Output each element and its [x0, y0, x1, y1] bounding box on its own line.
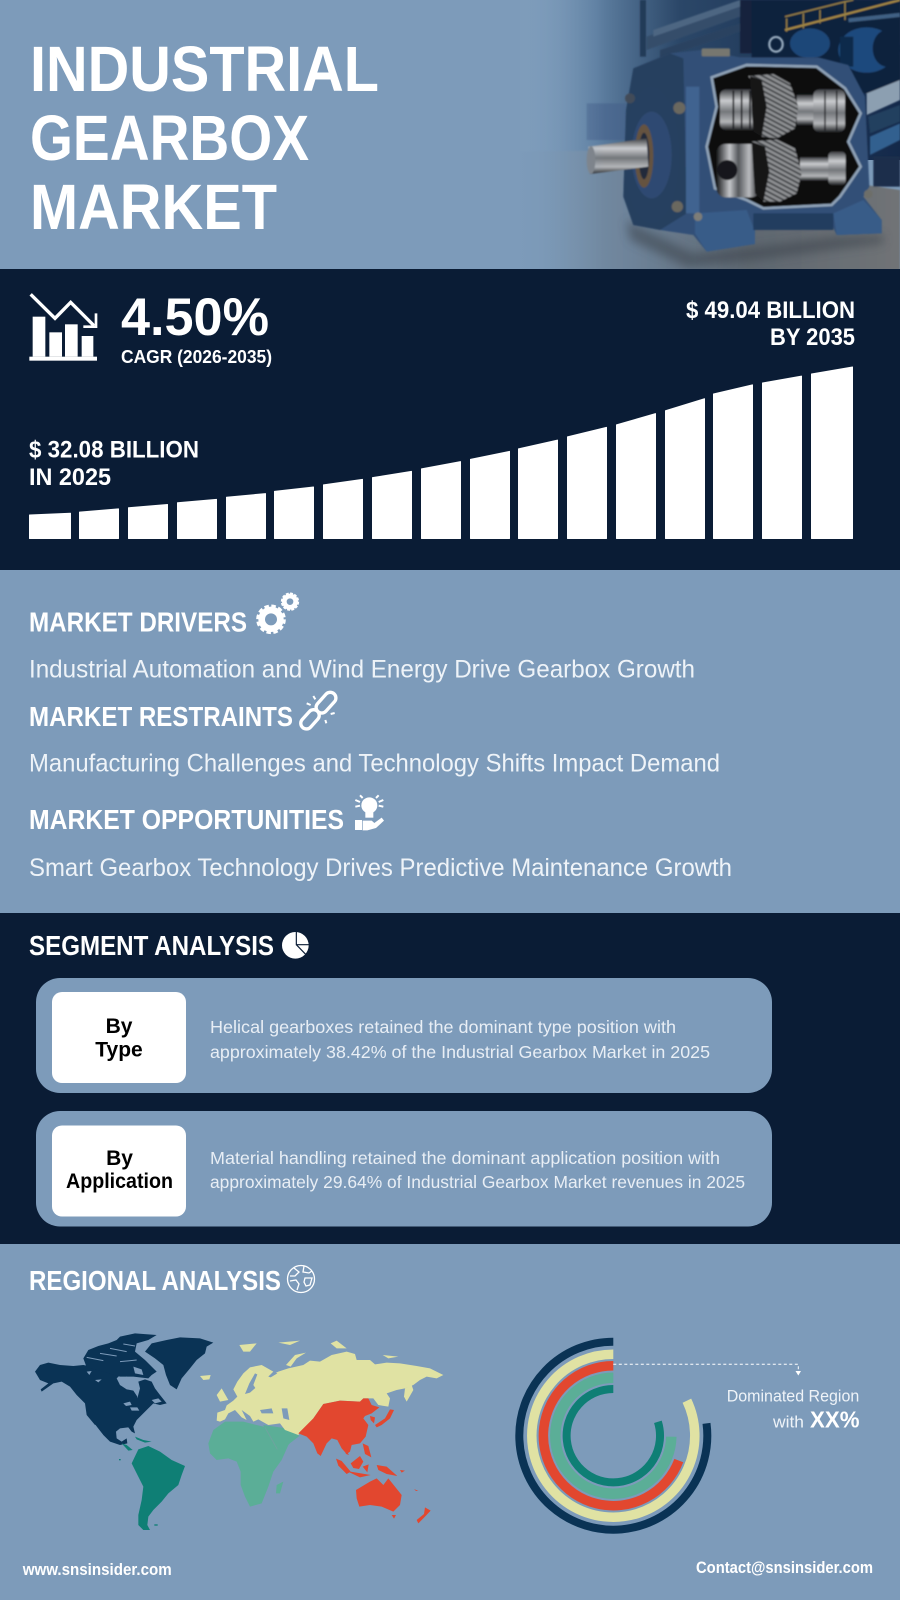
- label box: by application: [52, 1126, 186, 1216]
- heading: market opportunities: MARKET OPPORTUNITIES: [29, 804, 344, 835]
- photo: industrial gearbox in factory: [559, 0, 900, 269]
- label box: by application: Application: [66, 1170, 173, 1193]
- text: by application: approximately 29.64% of Industrial Gearbox Market revenues in 2025: [210, 1172, 745, 1192]
- text: drivers: Industrial Automation and Wind Energy Drive Gearbox Growth: [29, 656, 695, 684]
- label box: by type: [52, 992, 186, 1083]
- region: South America: [119, 1437, 185, 1530]
- panel: market size: [0, 269, 900, 570]
- bolts: [673, 102, 685, 114]
- text: by application: [210, 1148, 745, 1192]
- text: by type: Helical gearboxes retained the dominant type position with: [210, 1017, 676, 1037]
- text: by type: [210, 1017, 710, 1062]
- text: restraints: Manufacturing Challenges and Technology Shifts Impact Demand: [29, 750, 720, 778]
- card: by type: [36, 978, 772, 1093]
- callout: dominated region: [727, 1388, 860, 1433]
- floor shadow: [627, 220, 883, 267]
- output shaft: [588, 138, 648, 174]
- panel: market dynamics: [29, 594, 732, 882]
- title: GEARBOX: [30, 102, 309, 174]
- icon: broken chain: [298, 690, 338, 731]
- footer: website: www.snsinsider.com: [22, 1561, 172, 1579]
- flange: [624, 87, 679, 223]
- heading: market drivers: MARKET DRIVERS: [29, 606, 247, 638]
- bar chart: market growth: [30, 367, 852, 538]
- region: Asia-Pacific: [298, 1398, 431, 1523]
- label box: by type: Type: [95, 1038, 143, 1062]
- icon: declining chart: [29, 294, 97, 361]
- region: Europe and Russia: [200, 1341, 443, 1435]
- callout: dominated region: Dominated Region: [727, 1388, 859, 1406]
- CAGR value: 4.50%: [121, 288, 269, 347]
- 2025 value: IN 2025: [29, 464, 111, 491]
- title: [30, 33, 379, 243]
- heading: regional analysis: REGIONAL ANALYSIS: [29, 1265, 281, 1296]
- photo fade: [540, 152, 596, 269]
- icon: gears: [258, 594, 298, 632]
- 2035 value: $ 49.04 BILLION: [686, 297, 855, 324]
- title: INDUSTRIAL: [30, 33, 379, 105]
- panel: segment analysis: [0, 913, 900, 1244]
- card: by application: [36, 1111, 772, 1226]
- radial chart: [519, 1342, 707, 1530]
- callout: dominated region: XX%: [810, 1407, 860, 1433]
- 2025 value: [29, 436, 199, 491]
- text: by type: approximately 38.42% of the Industrial Gearbox Market in 2025: [210, 1042, 710, 1062]
- inland seas: [245, 1372, 289, 1420]
- callout arrow: [613, 1364, 801, 1376]
- CAGR label: CAGR (2026-2035): [121, 347, 272, 367]
- gearbox housing: [660, 50, 880, 249]
- footer: contact: Contact@snsinsider.com: [696, 1559, 873, 1577]
- panel: regional analysis: [22, 1265, 873, 1579]
- title: MARKET: [30, 171, 277, 243]
- icon: globe: [288, 1266, 314, 1292]
- 2025 value: $ 32.08 BILLION: [29, 436, 199, 464]
- heading: segment analysis: SEGMENT ANALYSIS: [29, 930, 274, 961]
- heading: market restraints: MARKET RESTRAINTS: [29, 701, 293, 732]
- text: opportunities: Smart Gearbox Technology Drives Predictive Maintenance Growth: [29, 854, 732, 882]
- region: Africa and Middle East: [208, 1422, 299, 1507]
- 2035 value: [686, 297, 855, 351]
- 2035 value: BY 2035: [770, 324, 855, 351]
- callout: dominated region: with: [772, 1414, 804, 1432]
- icon: pie chart: [282, 932, 309, 959]
- gear cavity: [707, 65, 861, 208]
- world map: [35, 1333, 443, 1530]
- icon: idea in hand: [355, 795, 384, 830]
- text: by application: Material handling retained the dominant application position with: [210, 1148, 720, 1168]
- shafts and gears: [720, 89, 762, 130]
- Hudson Bay and lakes: [87, 1344, 162, 1435]
- region: North America: [35, 1333, 213, 1445]
- label box: by type: By: [106, 1015, 133, 1038]
- label box: by application: By: [106, 1147, 133, 1170]
